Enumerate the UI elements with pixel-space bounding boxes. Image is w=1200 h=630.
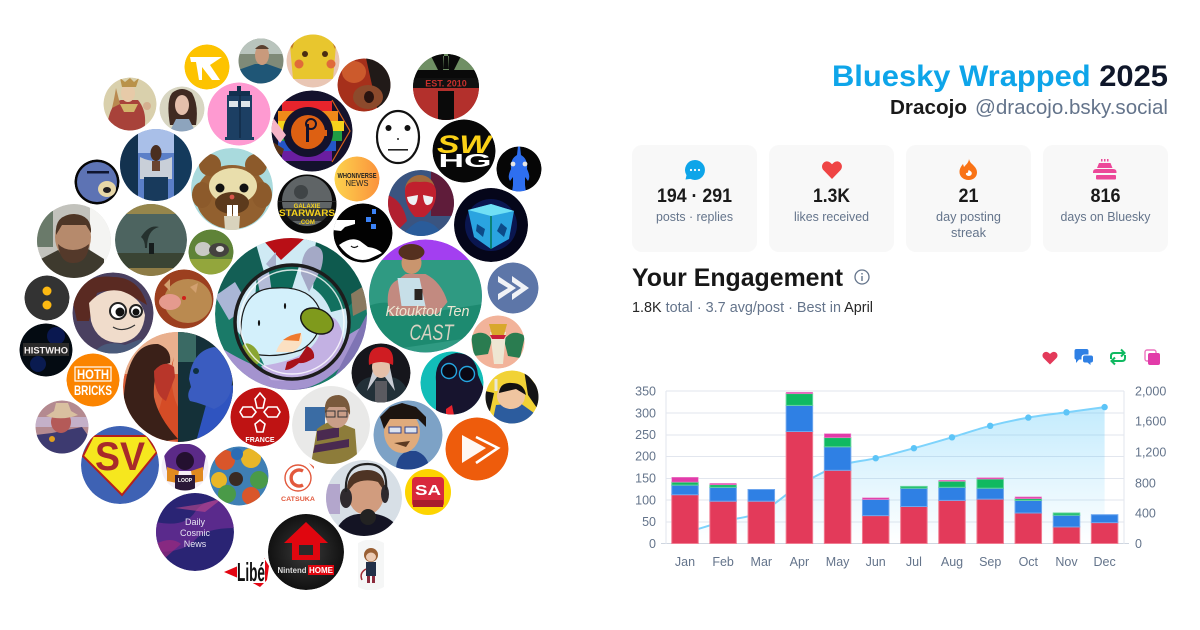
avatar: bidoof [191,148,273,230]
right axis labels: 0 [1135,537,1142,551]
avatar: galaxie star wars: GALAXIE [294,204,320,210]
avatar: Ktouktou Ten cast: CAST [410,320,455,345]
left axis labels: 200 [635,450,656,464]
month labels: Dec [1093,555,1116,569]
avatar: galaxie star wars [277,174,337,234]
icon: heart [822,161,842,179]
grid lines [661,391,1129,544]
month labels: Oct [1019,555,1039,569]
stat value: 194 · 291 [657,186,732,207]
month labels: Jun [866,555,886,569]
bars: Jan [672,477,698,544]
icon: birthday cake [1093,159,1116,180]
avatar: woman and blue alien split portrait [123,332,233,442]
avatar: SW HG: SW [437,131,494,159]
legend icon: reposts [1111,350,1125,364]
stat value: 816 [1090,186,1120,207]
header: title: Bluesky Wrapped 2025 [832,60,1168,93]
left axis labels: 50 [642,515,656,529]
avatar: pig [154,270,214,328]
month labels: Mar [751,555,772,569]
icon: info [855,270,869,284]
avatar: smiling glasses avatar [374,400,442,470]
avatar: main axolotl illustration [215,238,367,390]
month labels: Jan [675,555,695,569]
avatar: man in striped scarf [292,386,370,464]
avatar: daily cosmic news: Daily [185,517,205,527]
left axis labels: 250 [635,428,656,442]
month labels: Nov [1055,555,1078,569]
avatar: Nintend HOME: HOME [309,566,334,575]
right axis labels: 400 [1135,506,1156,520]
avatar: galaxie star wars: STARWARS [279,208,335,218]
avatar: Ktouktou Ten cast: Ktouktou Ten [386,303,470,320]
avatar: medieval queen [104,78,156,131]
left axis labels: 100 [635,494,656,508]
month labels [675,555,1116,569]
avatar: Libé logo [224,557,269,587]
left axis labels [635,384,656,551]
avatar: Ktouktou Ten cast [368,240,482,353]
legend icon: quotes [1145,350,1160,365]
legend icon: replies [1074,349,1093,365]
left axis labels: 300 [635,406,656,420]
chart: monthly engagement [635,384,1166,569]
avatar: IGN France: FRANCE [245,437,275,444]
stat label: likes received [794,209,869,224]
avatar: K logo [184,44,230,90]
avatar: SW HG [432,120,496,182]
avatar: galaxie star wars: .COM [299,220,315,226]
avatar: man in NFC shirt [238,38,284,84]
bars: Oct [1015,497,1042,544]
avatar: girl in red beanie [351,344,411,403]
header: handle: @dracojo.bsky.social [975,97,1168,119]
left axis labels: 350 [635,384,656,398]
avatar: Hoth Bricks [66,354,120,406]
avatar: whoniverse news [334,156,380,202]
stat card: days on Bluesky [1043,145,1168,252]
month labels: Sep [979,555,1001,569]
month labels: Apr [790,555,809,569]
avatar: blue cube [454,188,528,262]
bars: Nov [1053,513,1080,544]
avatar: spider on grass [188,230,234,275]
icon: speech bubble [685,160,705,180]
avatar: Catsuka logo: CATSUKA [281,496,315,503]
avatar: daily cosmic news [156,493,234,571]
icon: flame [960,158,977,180]
legend icon: likes heart [1042,352,1058,364]
avatar: tardis on pink [208,82,270,146]
avatar: HistWho [20,324,72,376]
avatar: Nintend HOME: Nintend [278,566,307,575]
avatar: IGN France [230,388,290,446]
month labels: Aug [941,555,963,569]
avatar: orange play arrow [446,418,508,480]
avatar cluster [20,34,542,590]
avatar: whoniverse news: WHONIVERSE [338,173,377,180]
avatar: vader in sunglasses [420,352,484,415]
avatar: Nintend HOME [268,514,344,590]
left axis labels: 150 [635,472,656,486]
bars: May [824,434,851,544]
avatar: HistWho: HISTWHO [24,346,68,356]
bars: Mar [748,490,775,544]
stat label [936,209,1001,240]
avatar: small tin robot [74,160,120,204]
avatar: chibi cat character [346,540,396,590]
bars: Aug [939,480,965,544]
right axis labels: 800 [1135,476,1156,490]
avatar: Catsuka logo [281,463,314,501]
month labels: Feb [712,555,734,569]
right axis labels: 1,600 [1135,414,1166,428]
avatar: pikachu [286,34,340,88]
avatar: hokusai parrot [471,316,525,368]
avatar: Hoth Bricks: HOTH [77,366,109,382]
bars: Apr [786,392,813,544]
avatar: sleeping white fox [333,204,392,262]
avatar: purple character Loop [162,444,208,491]
legend [1042,349,1160,365]
avatar: SA pixel logo [405,469,451,515]
avatar: blue pikmin [496,146,542,192]
avatar: SWU est. 2010: EST. 2010 [425,78,467,88]
avatar: blue double arrow [488,262,538,314]
right axis labels: 2,000 [1135,384,1166,398]
heading: your engagement: Your Engagement [632,264,844,292]
avatar: Libé logo: Libé [237,557,265,587]
stat label: posts · replies [656,209,733,224]
avatar: SV superman shield: SV [95,435,145,479]
avatar: man with headset [326,460,402,536]
avatar: minimal oval face [376,110,420,164]
avatar: purple character Loop: LOOP [178,478,193,484]
avatar: whoniverse news: NEWS [346,179,368,188]
avatar: two yellow dots [24,276,70,320]
avatar: rainbow G logo [271,90,352,172]
right axis labels [1135,384,1166,551]
avatar: Hoth Bricks: BRICKS [74,382,112,398]
line markers [872,404,1108,461]
bars: Feb [710,483,736,544]
avatar: upside-down red face [338,58,391,112]
stat label: days on Bluesky [1060,209,1151,224]
stat value: 1.3K [813,186,850,207]
month labels: Jul [906,555,922,569]
avatar: cartoon girl with glasses [72,272,154,354]
avatar: girl with long brown hair [160,86,204,133]
avatar: SW HG: HG [438,151,492,171]
stat card: day posting streak [906,145,1031,252]
bars: Jul [901,486,927,544]
avatar: ball pit [210,446,268,506]
avatar: dark green painting [115,204,187,276]
avatar: man with hat and microphone [35,400,89,454]
stat card: posts and replies [632,145,757,252]
bars: Dec [1091,515,1118,544]
stat label: day posting [936,209,1001,224]
header: display name: Dracojo [890,97,967,119]
avatar: bearded man [37,204,112,278]
avatar: SA pixel logo: SA [415,482,441,499]
avatar: smoking sumo [485,370,539,424]
avatar: daily cosmic news: Cosmic [180,528,210,538]
area under cumulative line [685,407,1105,544]
left axis labels: 0 [649,537,656,551]
month labels: May [826,555,850,569]
cumulative line [685,407,1105,532]
avatar: doctor in tardis doorway [120,129,192,201]
avatar: SWU est. 2010 [413,54,479,121]
stat label: streak [951,225,986,240]
stat card: likes received [769,145,894,252]
avatar: spiderman mask [388,170,455,236]
avatar: daily cosmic news: News [184,539,207,549]
engagement summary: 1.8K total · 3.7 avg/post · Best in April [632,300,873,316]
right axis labels: 1,200 [1135,446,1166,460]
bars: Jun [862,498,889,544]
bars: Sep [977,478,1003,544]
avatar: SV superman shield [81,426,159,504]
stat value: 21 [958,186,979,207]
